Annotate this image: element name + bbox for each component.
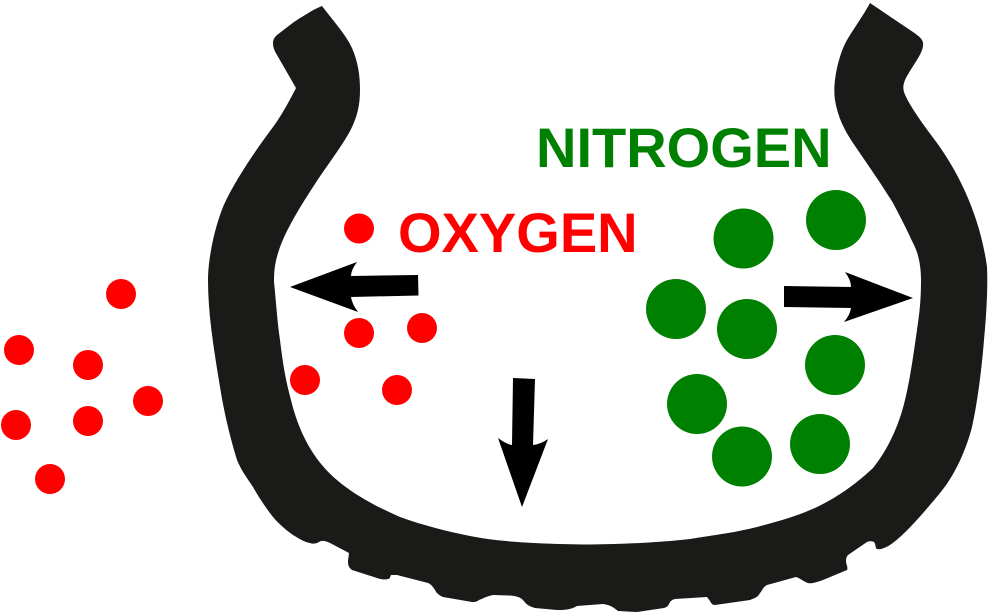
arrow: down — [498, 378, 548, 507]
oxygen label: OXYGEN — [398, 201, 638, 264]
arrow: right — [784, 272, 913, 322]
arrow: left — [290, 262, 418, 312]
nitrogen label: NITROGEN — [536, 116, 832, 179]
nitrogen molecules — [646, 190, 866, 486]
tire cross-section — [208, 3, 987, 612]
oxygen molecules — [1, 214, 437, 494]
